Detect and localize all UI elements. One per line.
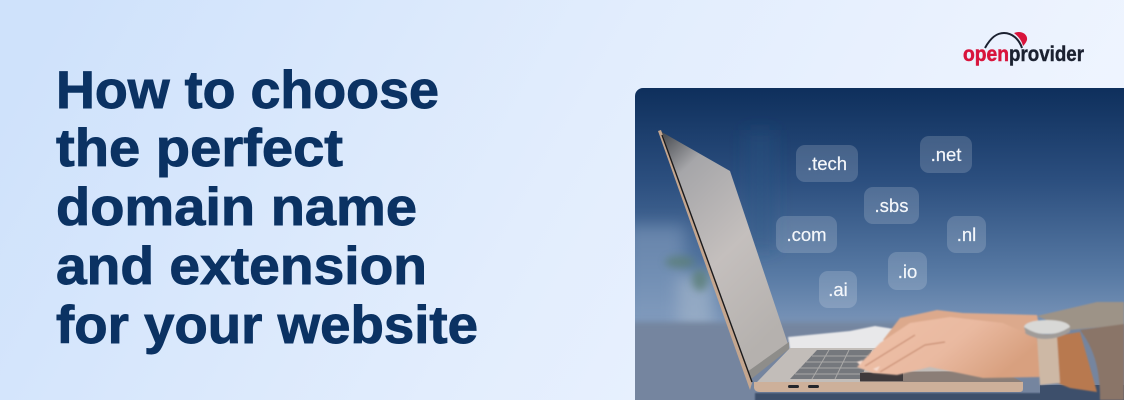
tag labels (786, 144, 976, 300)
table (625, 322, 1124, 400)
laptop base (757, 348, 1023, 382)
paper on desk (788, 326, 900, 350)
domain tags (776, 136, 986, 308)
front hand (857, 317, 1042, 378)
logo: openprovider: provider (1009, 42, 1085, 66)
tag .ai (819, 271, 857, 308)
tag labels: .tech (807, 153, 847, 174)
tag labels: .sbs (875, 195, 908, 216)
title: How to choose (56, 61, 439, 120)
nails (857, 360, 880, 371)
tag labels: .nl (957, 224, 976, 245)
logo: openprovider: open (963, 42, 1009, 66)
tag .nl (947, 216, 986, 253)
title (56, 61, 478, 355)
tag .io (888, 252, 927, 290)
tag labels: .com (786, 224, 827, 245)
photo panel (625, 88, 1124, 400)
tag .tech (796, 145, 858, 182)
laptop lid (660, 131, 789, 378)
wrist (1050, 332, 1097, 392)
plaid sleeve (1080, 324, 1124, 400)
tag labels: .io (898, 261, 917, 282)
hands (857, 302, 1124, 400)
tag .sbs (864, 187, 919, 224)
watch (1037, 336, 1060, 385)
blurred plant (665, 256, 708, 291)
tag .net (920, 136, 972, 173)
tag labels: .net (931, 144, 961, 165)
title: the perfect (56, 119, 343, 178)
blurred room (635, 219, 772, 324)
finger lines (865, 335, 945, 372)
title: and extension (56, 237, 427, 296)
upper sleeve (1037, 302, 1124, 330)
laptop (658, 130, 1023, 392)
logo: openprovider (963, 32, 1085, 66)
title: domain name (56, 178, 417, 237)
back hand (882, 309, 1039, 341)
tag labels: .ai (828, 279, 848, 300)
tag .com (776, 216, 837, 253)
title: for your website (56, 296, 478, 355)
